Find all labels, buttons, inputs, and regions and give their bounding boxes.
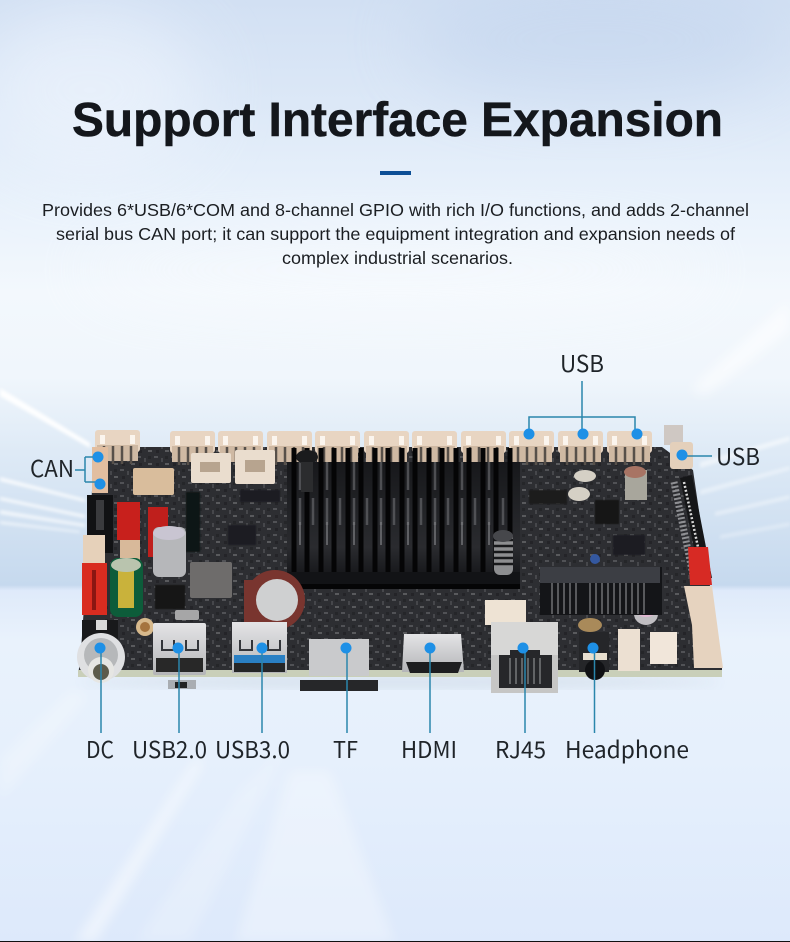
callout: DC: DC [86,731,114,765]
callout: USB2.0: USB2.0 [132,731,207,765]
description text: serial bus CAN port; it can support the equipment integration and expansion needs of [56,224,735,244]
callout: TF [333,642,358,765]
DC jack [77,620,125,683]
description text: complex industrial scenarios. [282,248,513,268]
PCB [78,447,722,677]
callout: CAN [30,450,106,490]
left side connectors [82,447,168,615]
mounting holes [136,470,602,636]
callout: USB3.0: USB3.0 [215,731,290,765]
callout: USB3.0 [215,642,290,765]
callout: USB top [524,345,642,440]
callout: USB top: USB [560,345,604,379]
right side connectors [618,425,723,671]
description text [42,200,749,268]
callout: HDMI [401,642,457,765]
bottom edge line [0,941,790,942]
HDMI port [402,634,464,673]
callout: RJ45 [495,642,546,765]
TF slot [300,639,378,691]
headphone jack [579,632,609,680]
description text: Provides 6*USB/6*COM and 8-channel GPIO with rich I/O functions, and adds 2-channel [42,200,749,220]
callout: USB2.0 [132,642,207,765]
callout: HDMI: HDMI [401,731,457,765]
callout: USB right [676,438,760,472]
heatsink [287,448,520,589]
USB 3.0 port [232,622,287,673]
board shadow [80,677,720,687]
capacitors [110,466,658,625]
callout: DC [86,642,114,765]
mini PCIe slot [540,554,662,615]
title: Support Interface Expansion [72,94,723,147]
wifi module [133,468,174,495]
board detail chips [155,490,645,609]
circuit board [77,425,723,693]
callout: Headphone: Headphone [565,731,689,765]
RJ45 port [485,600,558,693]
USB 2.0 port [153,610,206,689]
callout: CAN: CAN [30,450,74,484]
coin cell holder [244,570,305,630]
choke coils [296,450,318,464]
title underline [380,171,411,175]
callout: TF: TF [333,731,358,765]
callout: USB right: USB [716,438,760,472]
top connector row [95,430,652,465]
callout: RJ45: RJ45 [495,731,546,765]
small white connectors [191,450,275,484]
callout: Headphone [565,642,689,765]
